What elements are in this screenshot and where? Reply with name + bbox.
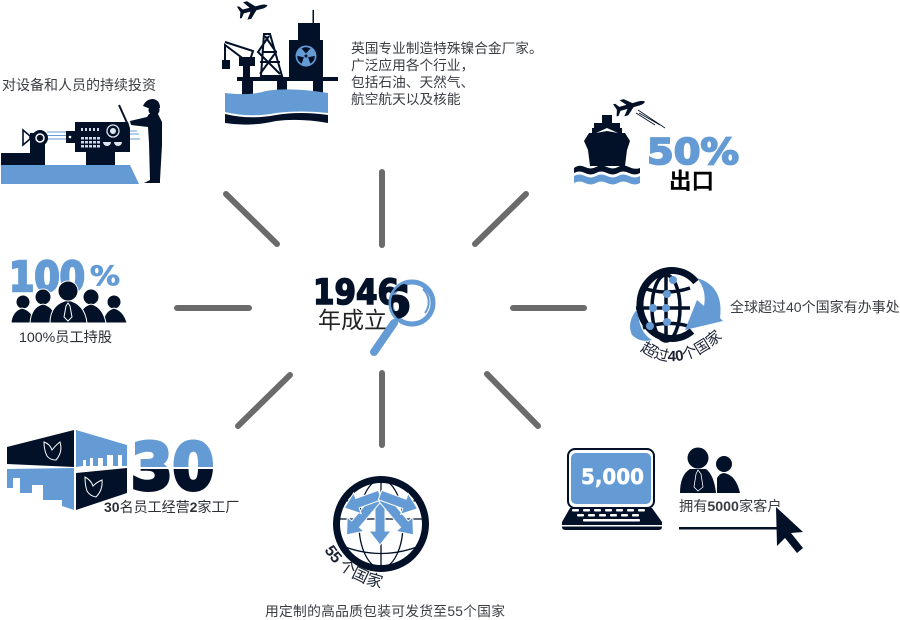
- panel: nickel alloy manufacturer: [222, 0, 543, 125]
- description: 全球超过40个国家有办事处: [730, 299, 900, 315]
- stat: %: [90, 261, 120, 292]
- center: founded 1946: [313, 273, 433, 352]
- description: 广泛应用各个行业，: [351, 57, 474, 73]
- panel: 55 countries: [265, 476, 505, 619]
- caption: 拥有5000家客户: [679, 498, 782, 515]
- icon: employees: [11, 281, 127, 323]
- caption: 用定制的高品质包装可发货至55个国家: [265, 603, 505, 619]
- description: 航空航天以及核能: [351, 92, 461, 107]
- panel: 55 countries: 55 个国家: [326, 544, 383, 588]
- panel: offices in 40 countries: 超过40个国家: [640, 330, 722, 362]
- underline: [679, 527, 779, 530]
- stat: 30: [131, 431, 214, 505]
- icon: magnifier: 6: [380, 277, 411, 328]
- stat: 100: [9, 253, 85, 301]
- icon: laptop: [562, 448, 662, 530]
- icon: two customers: [680, 448, 740, 493]
- stat: 50%: [647, 132, 739, 173]
- screen figure: 5,000: [581, 465, 644, 489]
- panel: 50% export: [574, 94, 739, 194]
- description: [351, 40, 543, 107]
- panel: investment: [1, 77, 162, 184]
- icon: oil rig: [222, 10, 338, 125]
- founded label: 年成立: [318, 307, 387, 333]
- panel: 100% employee owned: [9, 253, 127, 346]
- spokes: [177, 172, 584, 445]
- panel: 5000 customers: [562, 448, 803, 553]
- icon: airplane with trail: [613, 94, 665, 128]
- caption: 30名员工经营2家工厂: [104, 499, 239, 515]
- icon: ship: [574, 115, 640, 184]
- panel: 30 employees, 2 factories: [7, 430, 239, 515]
- stat: 30: [131, 431, 214, 505]
- description: 英国专业制造特殊镍合金厂家。: [351, 40, 543, 56]
- description: 包括石油、天然气、: [351, 74, 474, 90]
- caption: 100%员工持股: [19, 330, 112, 346]
- panel: offices in 40 countries: [630, 267, 900, 362]
- curved label: [640, 330, 730, 361]
- icon: cursor: [776, 507, 803, 553]
- year: 1946: [313, 273, 399, 313]
- icon: globe with arrow: [630, 270, 723, 341]
- curved label: [324, 550, 394, 590]
- caption: 对设备和人员的持续投资: [2, 77, 156, 93]
- stat: [133, 440, 213, 492]
- icon: factories: [7, 430, 127, 510]
- label: 出口: [669, 169, 714, 194]
- icon: airplane: [236, 0, 270, 21]
- icon: globe with arrows: [336, 480, 426, 568]
- icon: lathe and worker: [1, 99, 162, 184]
